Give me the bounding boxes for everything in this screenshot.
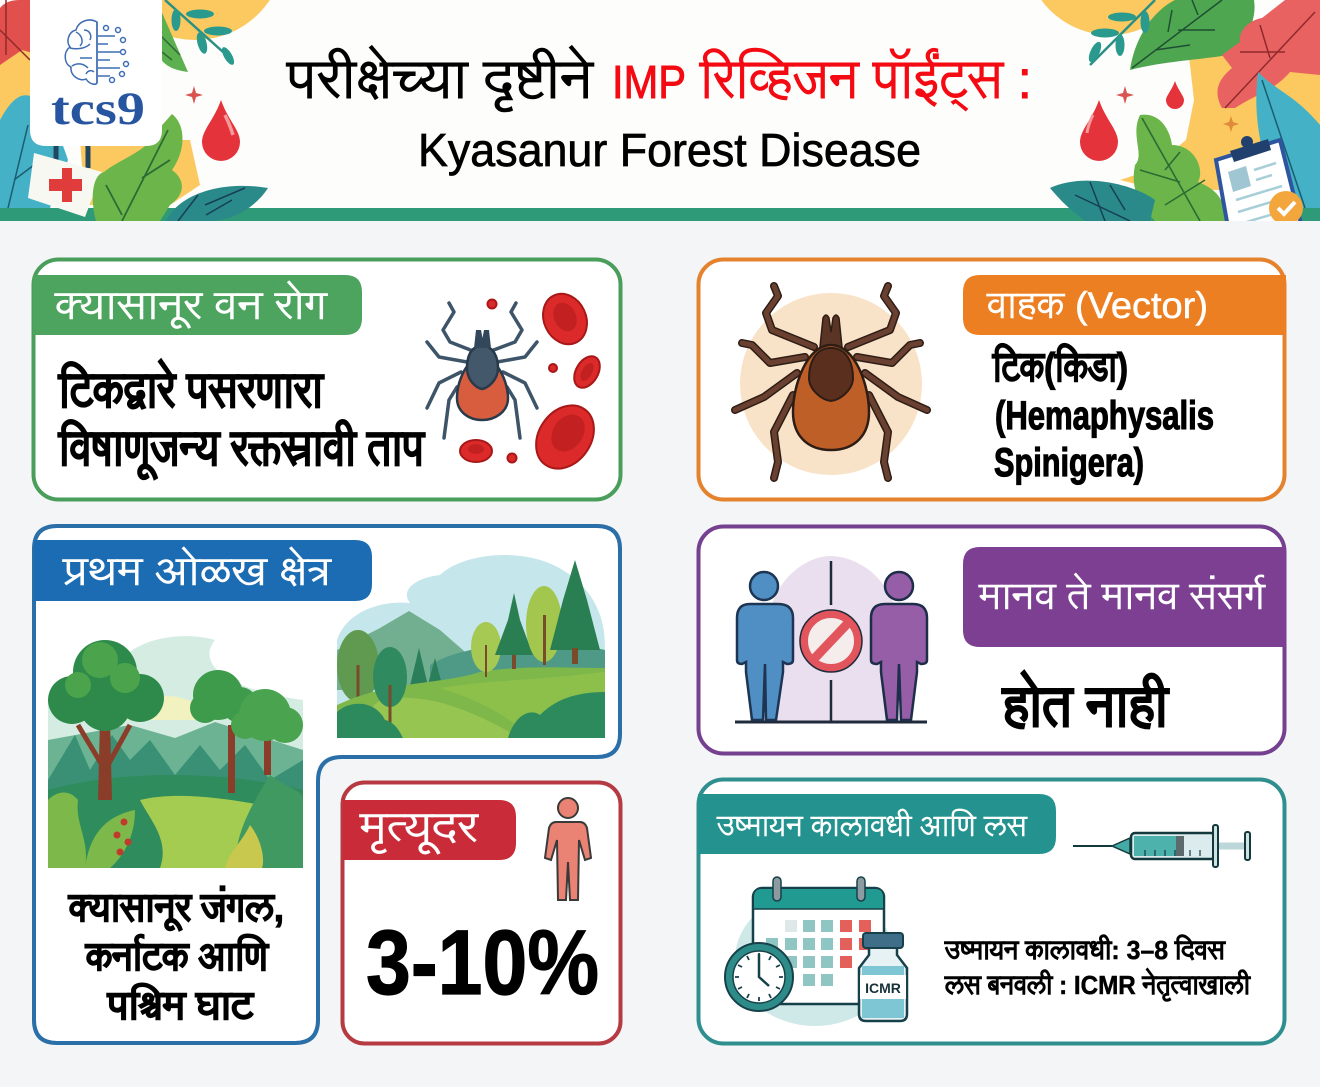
body text: टिकद्वारे पसरणारा — [57, 359, 324, 418]
left botanical decoration — [0, 0, 285, 221]
body text: टिक(किडा) — [991, 343, 1128, 390]
icon: clock — [725, 943, 793, 1011]
heading tab — [34, 540, 372, 601]
icon: blood drop small — [1166, 81, 1184, 109]
heading tab — [963, 547, 1286, 647]
panel: first identified area — [34, 526, 620, 1043]
body text: लस बनवली : ICMR नेतृत्वाखाली — [944, 967, 1251, 1002]
icon: syringe — [1073, 825, 1250, 867]
header banner — [0, 0, 1320, 221]
illustration: hills landscape — [337, 555, 605, 738]
mortality figure: 3-10% — [366, 912, 599, 1014]
body text — [57, 359, 426, 480]
right botanical decoration — [1041, 0, 1320, 221]
icon: tick with blood cells — [427, 287, 606, 480]
icon: purple person — [871, 572, 927, 720]
icon: person — [545, 798, 591, 900]
body text: विषाणूजन्य रक्तस्रावी ताप — [57, 420, 426, 480]
title line 1 — [286, 45, 1032, 112]
panel: Kyasanur forest disease — [33, 260, 620, 500]
body text: Spinigera) — [994, 441, 1144, 485]
heading tab — [33, 275, 362, 335]
icon: sparkle — [1116, 86, 1134, 104]
body text — [944, 934, 1251, 1002]
heading tab — [343, 800, 516, 860]
title line 1: IMP — [612, 56, 686, 108]
logo wordmark: tcs9 — [51, 83, 145, 135]
heading tab: वाहक (Vector) — [986, 285, 1208, 326]
icon: clipboard — [1214, 136, 1302, 221]
icon: blood drop — [202, 100, 240, 161]
heading tab: क्यासानूर वन रोग — [54, 281, 328, 329]
icon: ICMR vial: ICMR — [865, 980, 901, 996]
illustration: calendar, clock and vial — [725, 877, 907, 1026]
illustration: brown tick — [735, 286, 927, 478]
heading tab: उष्मायन कालावधी आणि लस — [716, 808, 1028, 843]
illustration: forest scene — [48, 636, 303, 868]
icon: first aid kit — [28, 142, 102, 217]
panel: incubation and vaccine — [698, 780, 1284, 1044]
icon: sparkle — [185, 86, 203, 104]
body text: होत नाही — [1001, 669, 1170, 738]
heading tab: मृत्यूदर — [359, 804, 479, 855]
logo — [30, 0, 162, 146]
icon: prohibition sign — [800, 610, 862, 672]
heading tab — [963, 275, 1286, 335]
text block: region — [67, 886, 284, 1028]
text block: region: क्यासानूर जंगल, — [67, 886, 284, 932]
panel: mortality rate — [342, 782, 620, 1044]
panel: human to human transmission — [698, 526, 1286, 754]
title line 1: परीक्षेच्या दृष्टीने — [286, 45, 594, 112]
title line 2: Kyasanur Forest Disease — [418, 124, 921, 176]
body text: उष्मायन कालावधी: 3–8 दिवस — [944, 934, 1226, 965]
icon: ICMR vial — [859, 933, 907, 1021]
heading tab — [698, 794, 1056, 854]
icon: calendar — [753, 877, 884, 1004]
icon: check badge — [1269, 191, 1303, 221]
heading tab: प्रथम ओळख क्षेत्र — [62, 547, 333, 594]
text block: region: कर्नाटक आणि — [84, 933, 269, 979]
icon: sparkle small — [1223, 116, 1239, 132]
icon: blue person — [737, 572, 793, 720]
icon: brain circuit — [65, 20, 128, 84]
body text: (Hemaphysalis — [995, 394, 1214, 438]
panel: vector — [698, 260, 1286, 500]
icon: blood drop large — [1080, 100, 1118, 161]
illustration: no contact between people — [735, 556, 927, 723]
heading tab: मानव ते मानव संसर्ग — [978, 573, 1266, 617]
text block: region: पश्चिम घाट — [106, 982, 255, 1028]
body text — [991, 343, 1214, 485]
title line 1: रिव्हिजन पॉईंट्स : — [699, 47, 1032, 111]
